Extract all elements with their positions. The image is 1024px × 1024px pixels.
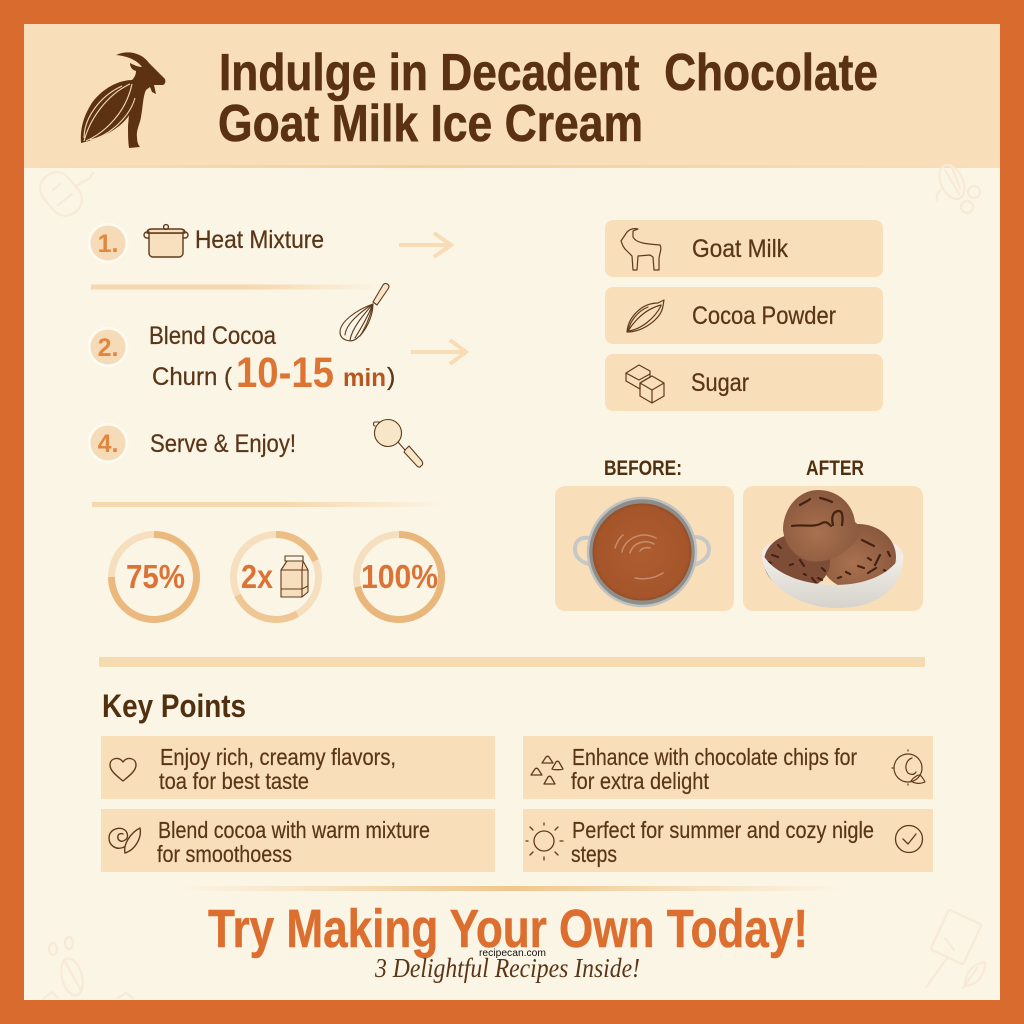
swirl highlights — [615, 535, 663, 579]
step 1 — [89, 224, 451, 262]
section rule — [99, 657, 925, 667]
stat ring: 75%: 75% — [126, 558, 185, 595]
icon: swirl — [109, 828, 140, 853]
icon: sun — [526, 823, 563, 860]
icon: sugar cubes — [626, 365, 664, 403]
title: Goat Milk Ice Cream — [218, 95, 643, 153]
number badge 4: 4. — [98, 430, 118, 458]
title: Indulge in Decadent Chocolate — [219, 44, 878, 102]
decoration: bottom-left leaf and beans — [44, 937, 133, 998]
header band — [24, 24, 1000, 168]
step label: churn: ) — [387, 363, 395, 391]
stat ring: 75% — [112, 534, 196, 620]
key point: flavors: toa for best taste — [159, 768, 309, 794]
ingredient: sugar — [605, 354, 883, 411]
stat ring: 2x — [218, 519, 334, 635]
watermark: recipecan.com — [479, 948, 546, 959]
scoop top — [783, 490, 859, 562]
bowl back — [762, 533, 902, 573]
step 4 — [89, 420, 423, 467]
number badge 4 — [89, 424, 127, 462]
step label: blend: Blend Cocoa — [149, 322, 276, 350]
arrow — [399, 233, 451, 257]
after heading: AFTER — [806, 457, 864, 480]
ingredient: cocoa powder — [605, 287, 883, 344]
tagline: 3 Delightful Recipes Inside! — [374, 953, 640, 983]
icon: moon — [892, 750, 925, 785]
icon: milk carton — [281, 556, 308, 597]
icon: chocolate chips — [531, 756, 563, 784]
panel: after, bowl of ice cream — [743, 486, 923, 611]
bowl front — [762, 552, 903, 608]
number badge 1: 1. — [98, 230, 118, 258]
arrow — [411, 340, 466, 364]
step 2 — [89, 284, 466, 397]
key point: blend: for smoothoess — [157, 841, 292, 867]
number badge 1 — [89, 224, 127, 262]
key point: chips — [523, 736, 933, 799]
step label: churn: Churn ( — [152, 363, 233, 391]
divider — [92, 502, 442, 507]
key point: flavors: Enjoy rich, creamy flavors, — [160, 744, 396, 770]
icon: whisk — [340, 284, 389, 341]
step label: Serve & Enjoy! — [150, 430, 296, 458]
icon: check — [896, 826, 922, 852]
key point: summer: steps — [571, 841, 617, 867]
before heading: BEFORE: — [604, 457, 682, 480]
step label: churn: 10-15 — [236, 349, 334, 397]
scoop left — [764, 534, 830, 590]
stat ring: 100%: 100% — [361, 558, 438, 595]
panel: before, pot of chocolate mixture — [555, 486, 734, 611]
key point: chips: for extra delight — [571, 768, 710, 794]
call to action: Try Making Your Own Today! — [208, 899, 808, 959]
key point: summer: Perfect for summer and cozy nigle — [572, 817, 874, 843]
scoop right — [820, 524, 896, 590]
icon: goat — [621, 229, 661, 270]
divider — [91, 284, 381, 290]
chocolate flecks — [768, 498, 890, 583]
pot handles — [575, 537, 709, 565]
stat ring: 2x: 2x — [241, 558, 274, 595]
ingredient: goat milk: Goat Milk — [692, 235, 788, 263]
ingredient: goat milk — [605, 220, 883, 277]
divider — [180, 886, 840, 891]
step label: churn — [152, 349, 395, 397]
decoration: top-right cocoa and beans — [934, 161, 980, 213]
key point: blend: Blend cocoa with warm mixture — [158, 817, 430, 843]
ingredient: sugar: Sugar — [691, 369, 749, 397]
key point: summer — [523, 809, 933, 872]
key point: chips: Enhance with chocolate chips for — [572, 744, 857, 770]
icon: scoop — [374, 420, 423, 467]
ingredient: cocoa powder: Cocoa Powder — [692, 302, 836, 330]
icon: pot — [144, 225, 188, 257]
title — [218, 44, 878, 153]
logo: goat and cocoa pod — [81, 52, 165, 148]
stat ring: 100% — [356, 534, 442, 620]
key point: flavors — [101, 736, 495, 799]
pot rim — [588, 498, 696, 606]
decoration: top-left whisk outline — [34, 166, 93, 222]
chocolate mixture — [592, 504, 692, 600]
step label: Heat Mixture — [195, 226, 324, 254]
icon: cocoa pod — [627, 300, 664, 332]
number badge 2: 2. — [98, 334, 118, 362]
icon: heart — [110, 758, 136, 781]
heading: key points: Key Points — [102, 688, 246, 724]
key point: blend — [101, 809, 495, 872]
number badge 2 — [89, 328, 127, 366]
decoration: bottom-right notebook and leaf — [926, 909, 985, 988]
step label: churn: min — [343, 364, 386, 392]
